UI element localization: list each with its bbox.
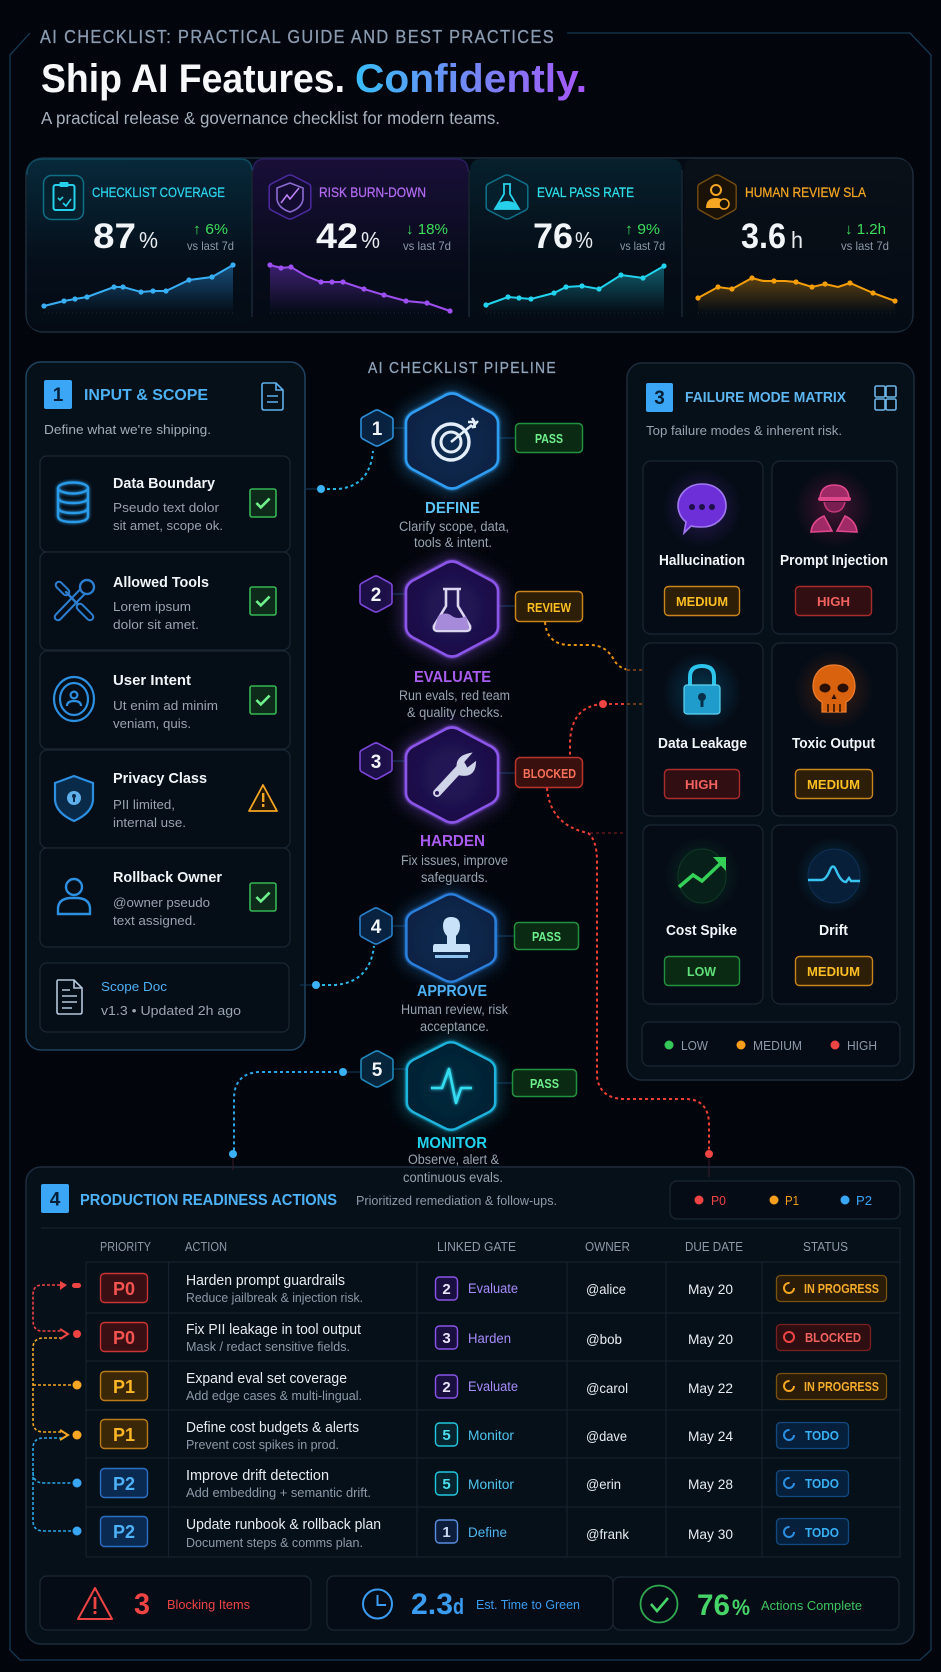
KPI card: human review SLA: [695, 175, 898, 313]
title: [41, 57, 587, 101]
row: define cost budgets: P1: [113, 1425, 135, 1445]
KPI card: eval pass rate: [483, 175, 667, 313]
table header: OWNER: [585, 1240, 630, 1254]
label: define: DEFINE: [425, 500, 480, 517]
icon: scope document: [57, 980, 82, 1014]
label: approve: acceptance.: [420, 1019, 489, 1034]
icon: database: [58, 482, 88, 522]
sparkline: risk: [267, 262, 453, 314]
section badge 1: [44, 380, 72, 409]
section badge 1: 1: [53, 385, 64, 406]
row: define cost budgets: Define cost budgets & alerts: [186, 1420, 359, 1436]
pipeline heading: AI CHECKLIST PIPELINE: [368, 360, 557, 377]
KPI card: checklist coverage: [41, 176, 236, 313]
badge: medium: MEDIUM: [807, 777, 860, 792]
legend: risk levels: MEDIUM: [753, 1038, 802, 1053]
icon: alert triangle: [78, 1588, 112, 1619]
eyebrow heading: AI CHECKLIST: PRACTICAL GUIDE AND BEST PRACTICES: [40, 27, 555, 47]
icon: skull: [794, 650, 874, 730]
row: harden prompt guardrails: P0: [113, 1279, 135, 1299]
status: pass: [516, 424, 582, 452]
number hexagon 2: 2: [371, 585, 381, 606]
check: pass: [250, 883, 276, 911]
row: expand eval set: [100, 1371, 886, 1403]
row: allowed tools: dolor sit amet.: [113, 617, 199, 632]
status: pass: PASS: [530, 1077, 559, 1091]
pipeline step 1: define: [361, 394, 582, 550]
row: user intent: Ut enim ad minim: [113, 698, 218, 713]
row: update runbook: Define: [468, 1525, 507, 1540]
card: drift: Drift: [819, 923, 848, 939]
status: pass: [514, 922, 578, 950]
row: rollback owner: Rollback Owner: [113, 869, 222, 886]
row: update runbook: Update runbook & rollback plan: [186, 1517, 381, 1533]
stat: actions complete: Actions Complete: [761, 1598, 862, 1613]
stat: actions complete: [613, 1577, 899, 1630]
card: scope doc: v1.3 • Updated 2h ago: [101, 1003, 241, 1018]
card: data leakage: Data Leakage: [658, 736, 747, 752]
row: improve drift detection: 5: [442, 1476, 451, 1493]
status: review: [516, 592, 582, 622]
sparkline: eval: [483, 263, 667, 313]
label: define: [399, 500, 509, 550]
number hexagon 3: [360, 743, 392, 779]
label: monitor: [403, 1135, 503, 1185]
label: approve: [401, 983, 508, 1034]
icon: warning: [249, 785, 277, 811]
row: update runbook: 1: [442, 1524, 451, 1541]
label: evaluate: EVALUATE: [414, 669, 491, 686]
row: rollback owner: @owner pseudo: [113, 895, 210, 910]
heading: failure mode matrix: FAILURE MODE MATRIX: [685, 390, 846, 406]
row: privacy class: PII limited,: [113, 797, 175, 812]
icon: flask hexagon: [406, 562, 498, 656]
row: data boundary: [40, 456, 290, 552]
row: expand eval set: Add edge cases & multi-lingual.: [186, 1389, 362, 1403]
section badge 3: [646, 383, 673, 412]
KPI card: human review SLA: h: [791, 227, 803, 253]
heading: input and scope: INPUT & SCOPE: [84, 387, 208, 404]
pipeline step 3: harden: [360, 728, 582, 885]
row: define cost budgets: [100, 1420, 848, 1452]
check: pass: [250, 587, 276, 615]
row: update runbook: [100, 1516, 848, 1550]
KPI card: risk burn-down: ↓ 18%: [406, 221, 448, 238]
icon: tools: [58, 580, 94, 617]
icon: target hexagon: [406, 394, 498, 488]
KPI card: risk burn-down: RISK BURN-DOWN: [319, 184, 426, 200]
KPI card: human review SLA: 3.6: [741, 217, 786, 256]
KPI card: risk burn-down: vs last 7d: [403, 239, 451, 253]
row: allowed tools: Lorem ipsum: [113, 599, 191, 614]
row: define cost budgets: May 24: [688, 1428, 733, 1444]
row: privacy class: [40, 750, 290, 848]
row: improve drift detection: Monitor: [468, 1477, 515, 1492]
number hexagon 4: 4: [371, 917, 382, 938]
icon: target user: [54, 677, 94, 721]
table: [41, 1228, 900, 1557]
number hexagon 4: [360, 908, 392, 944]
icon: speech bubble: [662, 468, 742, 548]
row: rollback owner: text assigned.: [113, 913, 196, 928]
row: update runbook: @frank: [586, 1526, 630, 1542]
row: fix PII leakage: @bob: [586, 1331, 622, 1347]
connector nodes: [229, 485, 713, 1158]
card: toxic output: Toxic Output: [792, 736, 875, 752]
badge: high: [796, 586, 872, 616]
icon: stamp hexagon: [406, 894, 496, 982]
label: evaluate: Run evals, red team: [399, 688, 510, 703]
KPI card: human review SLA: ↓ 1.2h: [845, 221, 886, 238]
row: user intent: User Intent: [113, 672, 191, 689]
row: define cost budgets: Monitor: [468, 1428, 515, 1443]
label: define: tools & intent.: [414, 535, 492, 550]
row: define cost budgets: 5: [442, 1427, 451, 1444]
status: pass: PASS: [535, 432, 563, 446]
priority flow connectors: [33, 1281, 82, 1536]
label: evaluate: & quality checks.: [407, 705, 503, 720]
KPI card: eval pass rate: %: [575, 227, 593, 253]
title: Ship AI Features.: [41, 57, 345, 101]
card: hallucination: Hallucination: [659, 553, 745, 569]
number hexagon 5: [361, 1051, 393, 1087]
KPI card: checklist coverage: %: [139, 227, 158, 253]
row: fix PII leakage: Harden: [468, 1331, 511, 1346]
legend: priority: P2: [856, 1193, 872, 1208]
badge: medium: MEDIUM: [807, 964, 860, 979]
row: harden prompt guardrails: Evaluate: [468, 1281, 518, 1296]
card: prompt injection: Prompt Injection: [780, 553, 888, 569]
card: hallucination: [643, 461, 763, 634]
subtitle: failure: Top failure modes & inherent risk.: [646, 423, 842, 438]
number hexagon 5: 5: [372, 1060, 383, 1081]
row: fix PII leakage: 3: [442, 1330, 451, 1347]
icon: shield hexagon: [269, 175, 311, 219]
row: improve drift detection: Add embedding + semantic drift.: [186, 1486, 371, 1500]
table header: PRIORITY: [100, 1240, 152, 1254]
legend: priority: P0: [711, 1193, 726, 1208]
row: define cost budgets: TODO: [805, 1429, 839, 1443]
label: monitor: MONITOR: [417, 1135, 487, 1152]
row: improve drift detection: @erin: [586, 1476, 621, 1492]
stat: blocking items: Blocking Items: [167, 1597, 250, 1612]
check: pass: [250, 489, 276, 517]
row: harden prompt guardrails: Harden prompt guardrails: [186, 1273, 345, 1289]
badge: low: [664, 956, 740, 986]
row: improve drift detection: Improve drift detection: [186, 1468, 329, 1484]
status: blocked: BLOCKED: [523, 766, 576, 781]
icon: flask hexagon: [486, 175, 528, 219]
row: fix PII leakage: [100, 1322, 870, 1354]
icon: reviewer hexagon: [698, 175, 736, 219]
legend: priority: P1: [785, 1193, 799, 1208]
panel: input and scope: [26, 362, 305, 1050]
KPI card: eval pass rate: 76: [533, 217, 573, 256]
row: fix PII leakage: BLOCKED: [805, 1331, 861, 1345]
badge: high: HIGH: [685, 777, 718, 792]
row: expand eval set: P1: [113, 1377, 135, 1397]
KPI card: checklist coverage: vs last 7d: [187, 239, 234, 253]
KPI card: checklist coverage: CHECKLIST COVERAGE: [92, 184, 225, 200]
stat: time to green: [327, 1576, 613, 1630]
icon: document: [262, 383, 283, 410]
icon: rising chart: [664, 837, 740, 913]
row: harden prompt guardrails: @alice: [586, 1281, 626, 1297]
card: prompt injection: [772, 461, 897, 634]
card: cost spike: Cost Spike: [666, 923, 737, 939]
stat: time to green: Est. Time to Green: [476, 1597, 580, 1612]
row: user intent: veniam, quis.: [113, 716, 191, 731]
status: pass: [512, 1070, 576, 1096]
card: scope doc: Scope Doc: [101, 979, 168, 994]
pipeline step 2: evaluate: [360, 562, 582, 720]
number hexagon 2: [360, 576, 392, 612]
icon: hooded attacker: [794, 468, 874, 548]
link stubs entering panel: [627, 670, 643, 704]
row: expand eval set: May 22: [688, 1380, 733, 1396]
icon: pulse hexagon: [407, 1042, 495, 1130]
icon: padlock: [662, 652, 742, 732]
legend: risk levels: LOW: [681, 1038, 709, 1053]
panel: failure mode matrix: [627, 363, 914, 1080]
section badge 4: 4: [50, 1190, 61, 1210]
number hexagon 1: 1: [372, 419, 383, 440]
title: Confidently.: [355, 57, 587, 101]
row: improve drift detection: P2: [113, 1474, 135, 1494]
card: toxic output: [772, 643, 897, 816]
stat: actions complete: %: [732, 1595, 750, 1620]
row: harden prompt guardrails: 2: [442, 1281, 451, 1298]
row: user intent: [40, 651, 290, 749]
label: harden: Fix issues, improve: [401, 853, 508, 868]
legend: risk levels: HIGH: [847, 1038, 877, 1053]
row: update runbook: May 30: [688, 1526, 733, 1542]
stat: actions complete: 76: [697, 1589, 730, 1622]
row: expand eval set: @carol: [586, 1380, 628, 1396]
row: fix PII leakage: May 20: [688, 1331, 733, 1347]
icon: matrix grid: [875, 386, 896, 410]
row: rollback owner: [40, 848, 290, 947]
row: allowed tools: [40, 552, 290, 650]
label: harden: safeguards.: [421, 870, 488, 885]
table header: DUE DATE: [685, 1240, 743, 1254]
row: harden prompt guardrails: [100, 1273, 886, 1305]
row: fix PII leakage: Fix PII leakage in tool output: [186, 1322, 361, 1338]
row: harden prompt guardrails: May 20: [688, 1281, 733, 1297]
label: define: Clarify scope, data,: [399, 519, 509, 534]
row: harden prompt guardrails: IN PROGRESS: [804, 1282, 879, 1296]
row: data boundary: Data Boundary: [113, 475, 216, 492]
row: improve drift detection: [100, 1468, 848, 1500]
KPI card: checklist coverage: ↑ 6%: [193, 221, 228, 238]
pipeline step 5: monitor: [361, 1042, 576, 1130]
connector lines: [234, 428, 709, 1154]
panel: KPI strip: [26, 158, 913, 332]
sparkline: coverage: [41, 262, 236, 313]
number hexagon 3: 3: [371, 752, 381, 773]
row: privacy class: Privacy Class: [113, 770, 207, 787]
badge: medium: [796, 956, 872, 986]
KPI card: human review SLA: HUMAN REVIEW SLA: [745, 184, 867, 200]
KPI card: risk burn-down: [267, 175, 453, 314]
table header: LINKED GATE: [437, 1240, 516, 1254]
table header: [100, 1240, 848, 1254]
label: harden: [401, 833, 508, 885]
KPI card: eval pass rate: EVAL PASS RATE: [537, 184, 634, 200]
sparkline: SLA: [695, 275, 898, 313]
icon: clock: [363, 1590, 392, 1618]
label: evaluate: [399, 669, 510, 720]
label: approve: Human review, risk: [401, 1002, 508, 1017]
icon: drift wave: [796, 837, 872, 913]
icon: shield lock: [55, 776, 93, 821]
table header: STATUS: [803, 1240, 848, 1254]
legend: priority: [670, 1181, 900, 1219]
row: fix PII leakage: P0: [113, 1328, 135, 1348]
badge: high: [664, 770, 740, 798]
status: review: REVIEW: [527, 600, 572, 615]
badge: medium: [664, 586, 740, 616]
icon: clipboard: [44, 176, 84, 220]
subtitle: remediation: Prioritized remediation & follow-ups.: [356, 1193, 557, 1208]
section badge 3: 3: [654, 388, 665, 409]
row: improve drift detection: TODO: [805, 1477, 839, 1491]
stat: blocking items: [40, 1576, 311, 1630]
subtitle: A practical release & governance checklist for modern teams.: [41, 108, 500, 128]
row: define cost budgets: Prevent cost spikes in prod.: [186, 1438, 339, 1452]
status: blocked: [516, 758, 582, 788]
badge: low: LOW: [687, 964, 717, 979]
row: allowed tools: Allowed Tools: [113, 574, 209, 591]
row: privacy class: internal use.: [113, 815, 186, 830]
row: harden prompt guardrails: Reduce jailbreak & injection risk.: [186, 1291, 363, 1305]
check: pass: [250, 686, 276, 714]
row: expand eval set: 2: [442, 1379, 451, 1396]
label: approve: APPROVE: [417, 983, 487, 1000]
row: expand eval set: IN PROGRESS: [804, 1380, 879, 1394]
badge: medium: MEDIUM: [676, 594, 728, 609]
card: data leakage: [643, 643, 763, 816]
card: scope doc: [40, 963, 289, 1032]
row: improve drift detection: May 28: [688, 1476, 733, 1492]
icon: check circle: [640, 1586, 678, 1622]
pipeline step 4: approve: [360, 894, 578, 1034]
table header: ACTION: [185, 1240, 227, 1254]
stat: time to green: 2.3: [411, 1588, 453, 1621]
KPI card: checklist coverage: 87: [93, 217, 136, 256]
KPI card: human review SLA: vs last 7d: [841, 239, 889, 253]
panel: production readiness actions: [26, 1159, 914, 1644]
status: pass: PASS: [532, 930, 561, 944]
number hexagon 1: [361, 410, 393, 446]
row: data boundary: Pseudo text dolor: [113, 500, 220, 515]
heading: production readiness: PRODUCTION READINESS ACTIONS: [80, 1192, 337, 1209]
badge: medium: [796, 770, 872, 798]
stat: time to green: d: [453, 1594, 464, 1619]
legend: risk levels: [642, 1022, 900, 1066]
row: update runbook: TODO: [805, 1526, 839, 1540]
icon: wrench hexagon: [406, 728, 498, 822]
KPI card: eval pass rate: vs last 7d: [620, 239, 665, 253]
row: data boundary: sit amet, scope ok.: [113, 518, 223, 533]
row: update runbook: P2: [113, 1522, 135, 1542]
card: cost spike: [643, 825, 763, 1004]
row: define cost budgets: @dave: [586, 1428, 627, 1444]
label: monitor: Observe, alert &: [408, 1152, 499, 1167]
badge: high: HIGH: [817, 594, 850, 609]
KPI card: risk burn-down: 42: [316, 217, 358, 256]
row: update runbook: Document steps & comms plan.: [186, 1536, 363, 1550]
KPI card: risk burn-down: %: [361, 227, 380, 253]
label: monitor: continuous evals.: [403, 1170, 503, 1185]
row: fix PII leakage: Mask / redact sensitive fields.: [186, 1340, 350, 1354]
subtitle: define: Define what we're shipping.: [44, 422, 211, 437]
card: drift: [772, 825, 897, 1004]
section badge 4: [41, 1184, 69, 1213]
row: expand eval set: Evaluate: [468, 1379, 518, 1394]
row: expand eval set: Expand eval set coverage: [186, 1371, 347, 1387]
KPI card: eval pass rate: ↑ 9%: [625, 221, 660, 238]
icon: owner: [58, 879, 90, 914]
stat: blocking items: 3: [134, 1588, 150, 1621]
label: harden: HARDEN: [420, 833, 485, 850]
